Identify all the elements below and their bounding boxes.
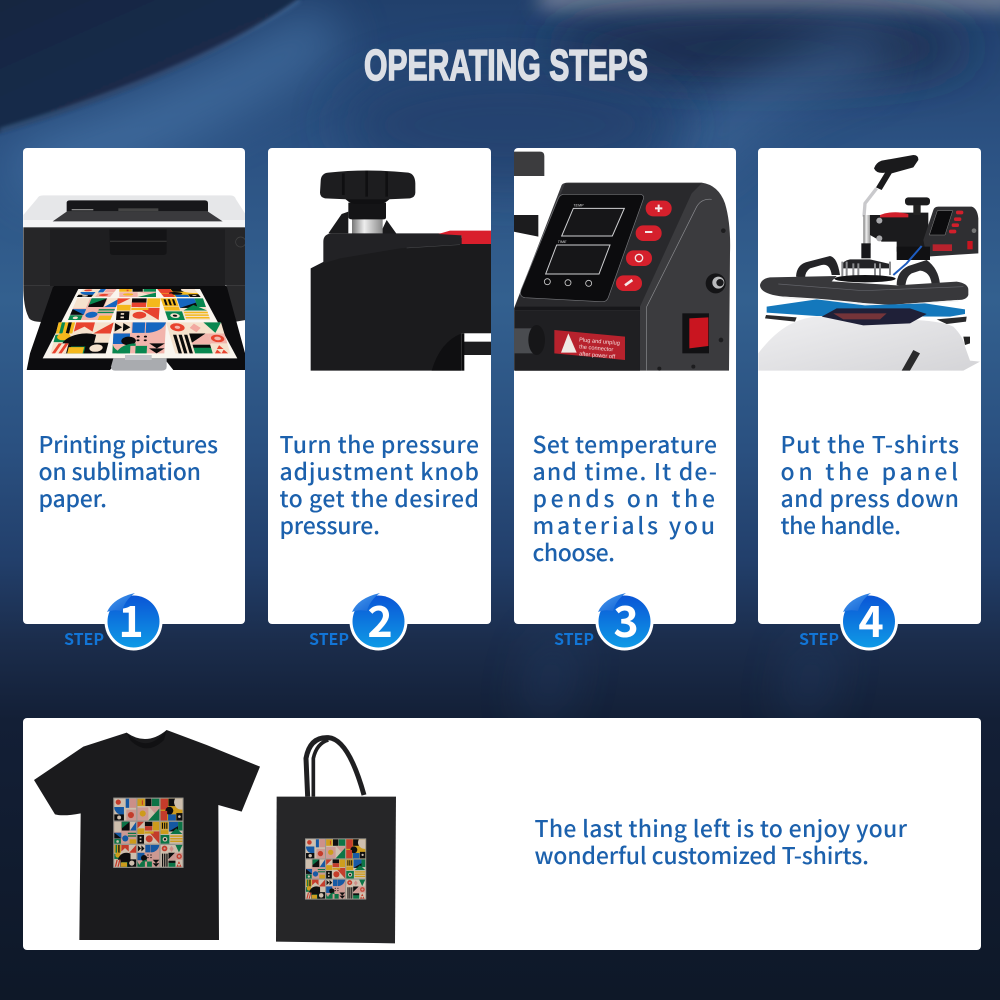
text: step 3: pends on the bbox=[532, 480, 715, 514]
image: control panel bbox=[513, 152, 730, 371]
image: heat press bbox=[758, 155, 980, 371]
image: control panel: Plug and unplug bbox=[579, 337, 620, 347]
print on t-shirt bbox=[113, 798, 184, 868]
step badge 3: 3 bbox=[613, 588, 639, 650]
image: printer bbox=[23, 195, 246, 371]
text: step 1 bbox=[38, 426, 218, 514]
text: step 2: pressure. bbox=[280, 507, 380, 541]
panel: result bbox=[23, 718, 981, 950]
image: control panel: the connector bbox=[579, 344, 614, 353]
text: step 4: the handle. bbox=[780, 507, 901, 541]
step badge 1: 1 bbox=[118, 588, 144, 650]
text: step 1: on sublimation bbox=[38, 453, 201, 487]
step badge 3 bbox=[554, 588, 654, 650]
image: tote bag bbox=[276, 738, 396, 943]
text: result: The last thing left is to enjoy your bbox=[534, 810, 908, 844]
panel: step 4 bbox=[758, 148, 981, 624]
image: control panel: TEMP bbox=[573, 203, 584, 207]
text: step 2: adjustment knob bbox=[280, 453, 479, 487]
text: step 2: to get the desired bbox=[280, 480, 479, 514]
step badge 4 bbox=[799, 588, 898, 650]
image: control panel: TIME bbox=[558, 240, 567, 244]
print on tote bag bbox=[305, 838, 366, 900]
image: black t-shirt bbox=[34, 730, 260, 940]
text: step 4 bbox=[780, 426, 959, 541]
text: step 2 bbox=[280, 426, 479, 541]
step badge 3: STEP bbox=[554, 626, 594, 650]
step badge 1: STEP bbox=[64, 626, 104, 650]
text: step 3: and time. It de- bbox=[532, 453, 717, 487]
text: step 3: materials you bbox=[532, 507, 715, 541]
step badge 1 bbox=[64, 588, 162, 650]
text: step 3 bbox=[532, 426, 717, 568]
image: pressure knob bbox=[311, 170, 493, 373]
panel: step 2 bbox=[268, 148, 493, 624]
image: control panel: after power off bbox=[579, 351, 616, 361]
step badge 2: 2 bbox=[367, 588, 393, 650]
panel: step 1 bbox=[23, 148, 246, 624]
text: step 1: Printing pictures bbox=[38, 426, 218, 460]
step badge 4: 4 bbox=[858, 588, 884, 650]
text: step 2: Turn the pressure bbox=[280, 426, 479, 460]
step badge 2: STEP bbox=[309, 626, 349, 650]
title: OPERATING STEPS bbox=[364, 41, 648, 90]
text: result bbox=[534, 810, 908, 871]
text: step 3: Set temperature bbox=[532, 426, 717, 460]
text: result: wonderful customized T-shirts. bbox=[534, 837, 869, 871]
panel: step 3 bbox=[513, 148, 736, 624]
step badge 2 bbox=[309, 588, 408, 650]
text: step 4: Put the T-shirts bbox=[780, 426, 959, 460]
text: step 4: and press down bbox=[780, 480, 959, 514]
step badge 4: STEP bbox=[799, 626, 839, 650]
text: step 4: on the panel bbox=[780, 453, 958, 487]
text: step 3: choose. bbox=[532, 534, 615, 568]
text: step 1: paper. bbox=[38, 480, 107, 514]
